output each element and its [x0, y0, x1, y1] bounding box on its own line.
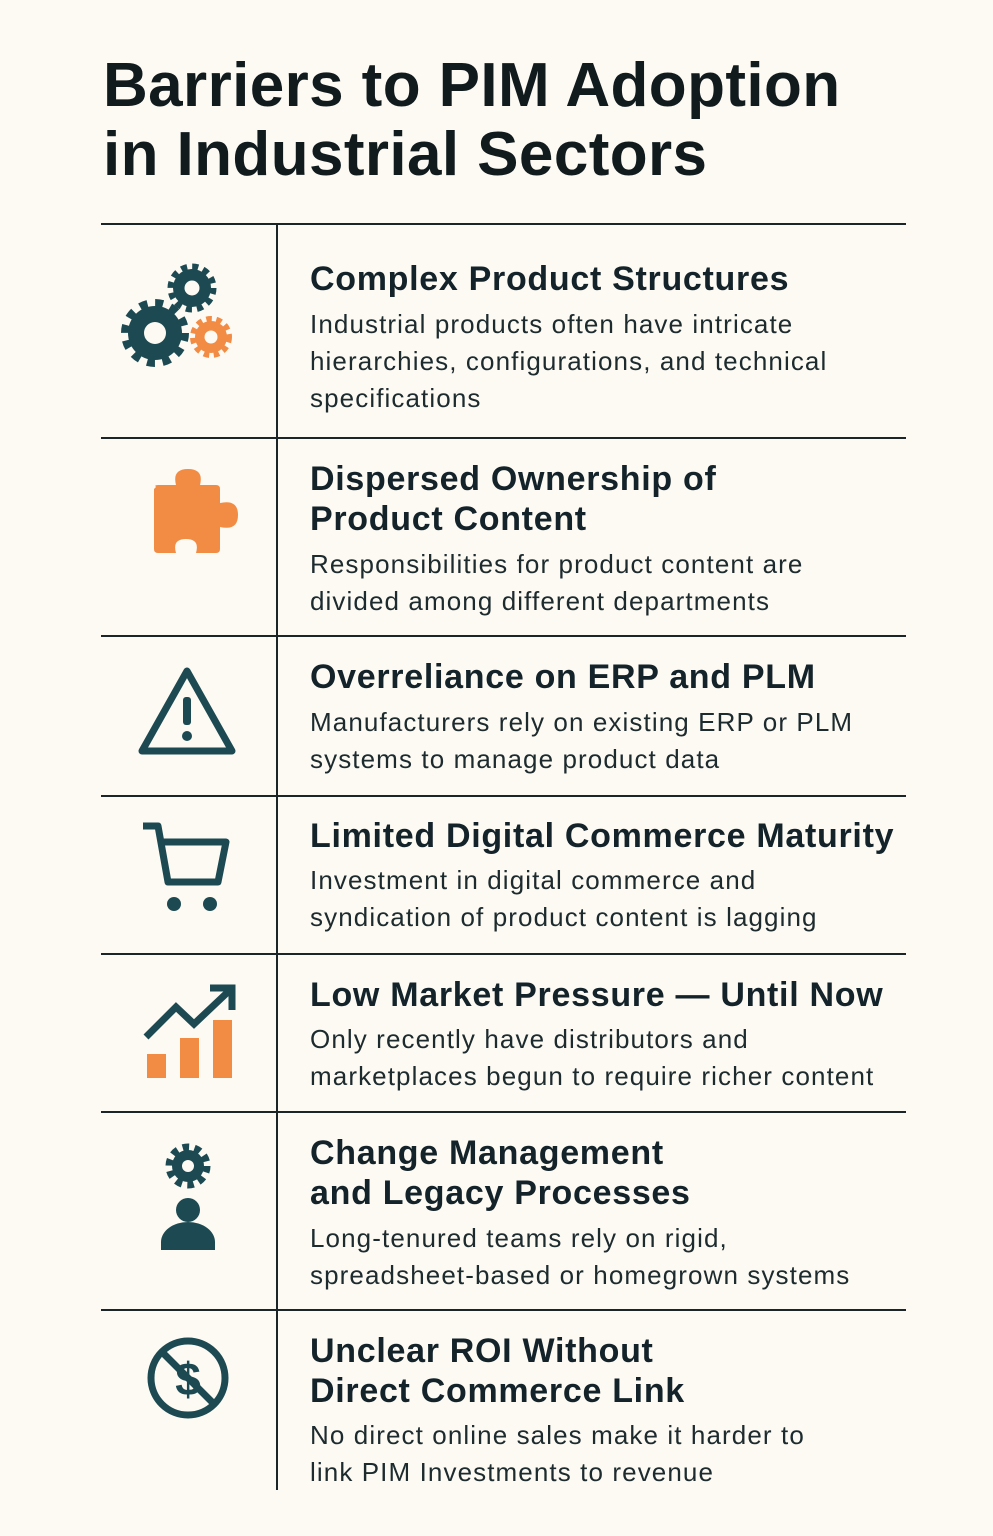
heading: roi: [310, 1332, 685, 1410]
heading: change: Change Management: [310, 1134, 664, 1172]
text: overreliance: Manufacturers rely on existing ERP or PLM: [310, 707, 853, 737]
icon: no dollar: [148, 1338, 228, 1418]
icon: no dollar: $: [175, 1353, 201, 1405]
text: commerce: syndication of product content is lagging: [310, 902, 818, 932]
text: complex: [310, 309, 827, 413]
text: change: Long-tenured teams rely on rigid,: [310, 1223, 728, 1253]
heading: dispersed: Product Content: [310, 500, 587, 538]
text: overreliance: systems to manage product data: [310, 744, 720, 774]
text: change: [310, 1223, 850, 1290]
heading: change: [310, 1134, 691, 1212]
icon: puzzle: [154, 469, 238, 553]
text: market: Only recently have distributors and: [310, 1024, 749, 1054]
title: Barriers to PIM Adoption: [103, 51, 841, 120]
icon: chart: [144, 984, 236, 1078]
heading: overreliance: Overreliance on ERP and PLM: [310, 658, 816, 696]
heading: change: and Legacy Processes: [310, 1174, 691, 1212]
text: complex: hierarchies, configurations, and technical: [310, 346, 827, 376]
icon: cart: [143, 822, 230, 911]
text: market: marketplaces begun to require richer content: [310, 1061, 874, 1091]
text: commerce: [310, 865, 818, 932]
text: dispersed: [310, 549, 803, 616]
icon: person with gear: [161, 1144, 215, 1250]
heading: dispersed: [310, 460, 716, 538]
text: roi: link PIM Investments to revenue: [310, 1457, 714, 1487]
text: market: [310, 1024, 874, 1091]
icon: gears: [121, 264, 232, 367]
text: commerce: Investment in digital commerce and: [310, 865, 756, 895]
text: overreliance: [310, 707, 853, 774]
heading: roi: Unclear ROI Without: [310, 1332, 654, 1370]
text: change: spreadsheet-based or homegrown systems: [310, 1260, 850, 1290]
heading: market: Low Market Pressure — Until Now: [310, 976, 883, 1014]
text: dispersed: divided among different departments: [310, 586, 770, 616]
title: [103, 51, 841, 189]
text: dispersed: Responsibilities for product content are: [310, 549, 803, 579]
heading: dispersed: Dispersed Ownership of: [310, 460, 716, 498]
text: complex: Industrial products often have intricate: [310, 309, 793, 339]
text: complex: specifications: [310, 383, 481, 413]
heading: complex: Complex Product Structures: [310, 260, 789, 298]
title: in Industrial Sectors: [103, 120, 707, 189]
text: roi: [310, 1420, 805, 1487]
text: roi: No direct online sales make it harder to: [310, 1420, 805, 1450]
heading: commerce: Limited Digital Commerce Maturity: [310, 817, 894, 855]
icon: warning: [138, 668, 236, 754]
heading: roi: Direct Commerce Link: [310, 1372, 685, 1410]
